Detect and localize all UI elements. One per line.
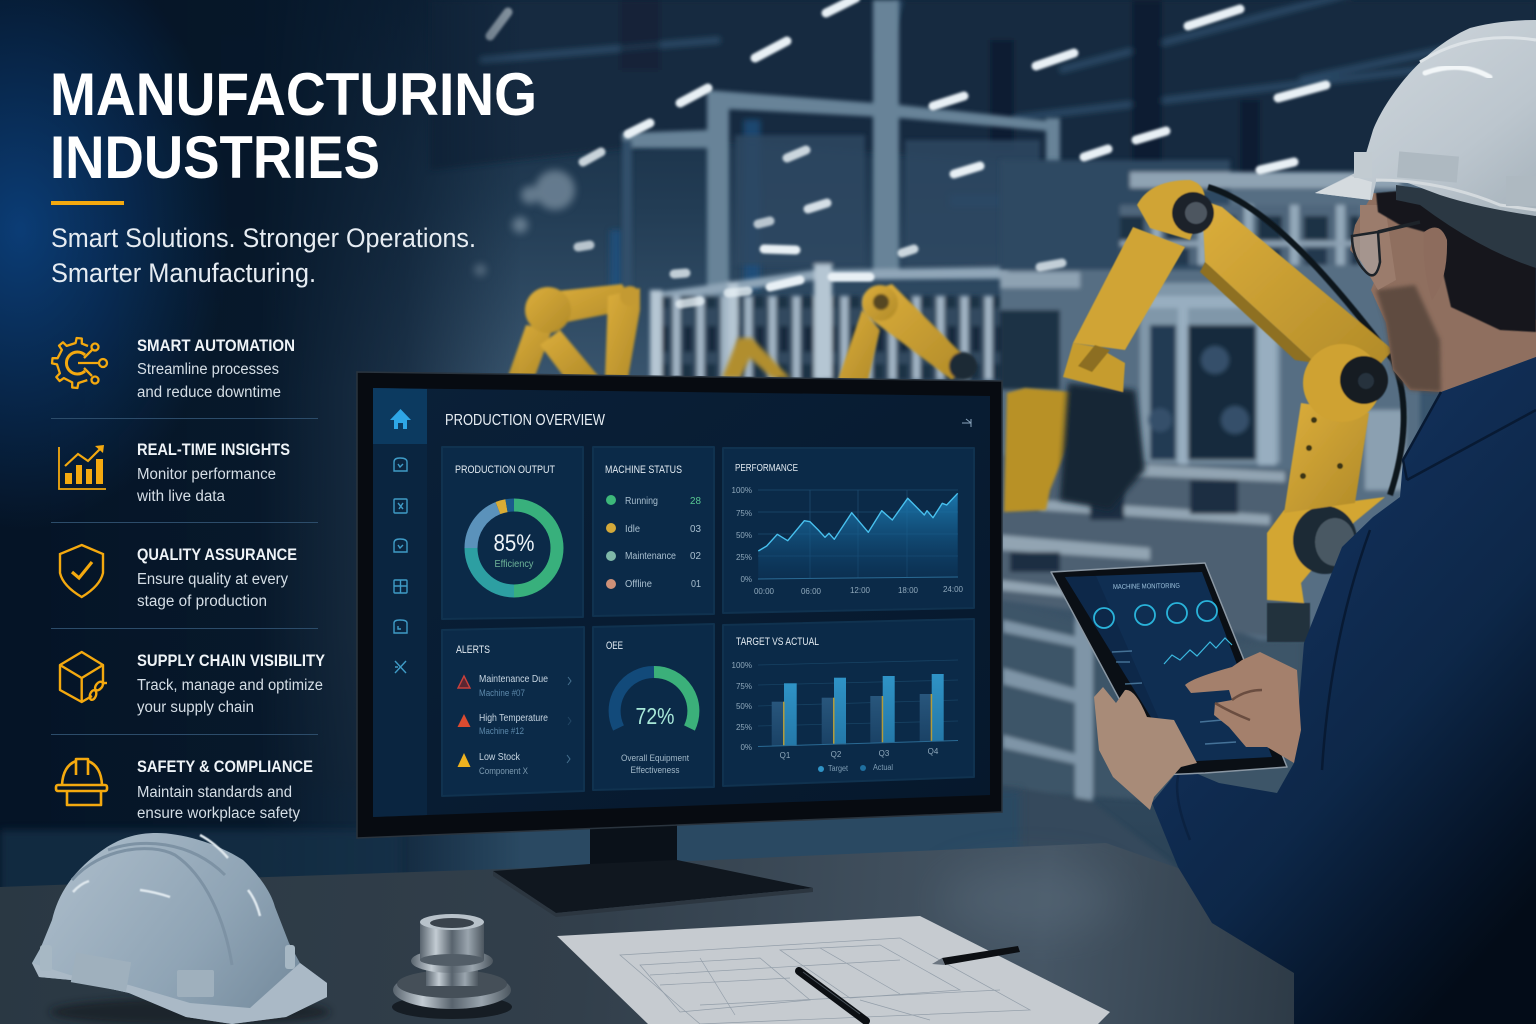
feature list	[51, 336, 326, 822]
panel: OEE: 72%	[636, 703, 674, 729]
icon: gear	[52, 338, 107, 388]
icon: shield	[60, 545, 103, 597]
subtitle	[51, 223, 476, 288]
panel: target vs actual: 75%	[736, 682, 752, 691]
feature: safety and compliance	[56, 757, 313, 822]
panel: performance: 0%	[740, 575, 752, 584]
title: MANUFACTURING	[50, 61, 537, 128]
monitor bezel	[357, 372, 1002, 838]
blueprint paper	[557, 916, 1110, 1024]
feature: smart automation	[52, 336, 295, 401]
sidebar icons	[394, 458, 407, 673]
feature: real-time insights	[59, 440, 290, 505]
second pen	[932, 946, 1020, 965]
hard hat	[1315, 20, 1536, 216]
title	[50, 61, 537, 191]
panel: OEE: Effectiveness	[630, 765, 680, 776]
panel: performance: 75%	[736, 509, 752, 518]
panel: performance: 25%	[736, 553, 752, 562]
panel: performance	[723, 448, 974, 613]
panel: machine status: Idle	[625, 524, 640, 535]
feature: safety and compliance: ensure workplace safety	[137, 805, 300, 822]
feature: smart automation: Streamline processes	[137, 361, 279, 378]
panel: performance: 50%	[736, 531, 752, 540]
feature: smart automation: and reduce downtime	[137, 384, 281, 401]
panel: production output	[442, 447, 583, 619]
icon: alert yellow	[458, 753, 470, 767]
robot arm: small distant	[722, 338, 790, 378]
panel: target vs actual: Q2	[831, 750, 842, 759]
panel: target vs actual: 50%	[736, 702, 752, 711]
subtitle: Smart Solutions. Stronger Operations.	[51, 223, 476, 253]
feature: supply chain visibility	[60, 651, 326, 716]
panel: target vs actual: Q3	[879, 749, 890, 758]
panel: OEE: Overall Equipment	[621, 753, 689, 764]
lower frame	[1000, 600, 1300, 810]
feature: safety and compliance: SAFETY & COMPLIANCE	[137, 757, 313, 776]
feature: real-time insights: REAL-TIME INSIGHTS	[137, 440, 290, 459]
feature: real-time insights: Monitor performance	[137, 466, 276, 483]
legend	[818, 763, 893, 773]
feature: quality assurance: stage of production	[137, 593, 267, 610]
panel: OEE	[593, 624, 714, 790]
sidebar	[373, 388, 427, 817]
tablet	[1051, 563, 1287, 775]
panel: performance: 24:00	[943, 585, 964, 594]
panel: alerts: ALERTS	[456, 644, 490, 656]
floor	[300, 790, 1020, 880]
shoulder	[1137, 180, 1205, 240]
panel: machine status: Offline	[625, 579, 652, 590]
conveyor rows	[1000, 455, 1290, 640]
pen on paper	[799, 971, 866, 1021]
helmet band	[1396, 185, 1536, 268]
feature: supply chain visibility: Track, manage and optimize	[137, 677, 323, 694]
feature: quality assurance: QUALITY ASSURANCE	[137, 545, 297, 564]
gauge chart	[615, 672, 693, 728]
panel: performance: 100%	[732, 486, 752, 495]
panel: alerts: Maintenance Due	[479, 674, 548, 685]
right hand	[1185, 652, 1301, 763]
left background bokeh	[474, 170, 575, 276]
panel: alerts: Machine #07	[479, 688, 525, 698]
monitor stand	[493, 824, 813, 917]
tablet: MACHINE MONITORING	[1113, 583, 1180, 591]
icon: helmet	[56, 759, 107, 805]
subtitle: Smarter Manufacturing.	[51, 258, 316, 288]
right machinery	[1000, 160, 1420, 870]
glasses	[1352, 222, 1420, 275]
export icon	[962, 419, 971, 427]
panel: target vs actual: 25%	[736, 723, 752, 732]
feature: quality assurance	[60, 545, 297, 610]
bar chart	[758, 660, 958, 746]
jacket details	[1177, 392, 1536, 840]
robot arm: middle	[838, 284, 977, 380]
panel: performance: PERFORMANCE	[735, 463, 798, 474]
icon: chart	[59, 445, 106, 489]
panel: machine status: Maintenance	[625, 551, 676, 562]
ceiling structure	[430, 0, 1536, 310]
robot arm: far left	[508, 284, 640, 378]
robot arm: main yellow	[1004, 180, 1404, 642]
feature: safety and compliance: Maintain standards and	[137, 784, 292, 801]
panel: production output: PRODUCTION OUTPUT	[455, 464, 555, 476]
title accent	[51, 201, 124, 205]
panel: machine status: Running	[625, 496, 658, 507]
panel: alerts: High Temperature	[479, 713, 548, 724]
panel: machine status: 02	[690, 551, 701, 562]
icon: box	[60, 652, 107, 702]
worker	[1051, 20, 1536, 1024]
secondary yellow machine	[1004, 388, 1072, 512]
panel: target vs actual: Q4	[928, 747, 939, 756]
icon: home	[390, 409, 411, 429]
left dark panel overlay	[0, 0, 520, 1024]
jacket	[1152, 357, 1536, 1024]
panel: production output: Efficiency	[494, 559, 534, 570]
feature: quality assurance: Ensure quality at every	[137, 571, 288, 588]
panel: target vs actual: TARGET VS ACTUAL	[736, 636, 819, 648]
legend: Actual	[873, 763, 893, 772]
panel: machine status: MACHINE STATUS	[605, 464, 682, 476]
feature: smart automation: SMART AUTOMATION	[137, 336, 295, 355]
panel: production output: 85%	[494, 530, 534, 557]
legend: Target	[828, 764, 849, 773]
upper arm	[1202, 200, 1393, 375]
icon: alert red	[458, 714, 470, 727]
desk	[0, 843, 1294, 1024]
panel: machine status: 28	[690, 496, 701, 507]
panel: OEE: OEE	[606, 640, 623, 652]
panel: target vs actual: Q1	[780, 751, 791, 760]
steel frames	[622, 0, 1140, 380]
panel: performance: 00:00	[754, 587, 775, 596]
ear	[1424, 228, 1447, 300]
monitor	[357, 372, 1002, 917]
panel: performance: 06:00	[801, 587, 822, 596]
safety helmet on desk	[32, 833, 330, 1024]
panel: alerts	[442, 627, 584, 796]
panel: performance: 18:00	[898, 586, 919, 595]
monitor screen	[373, 388, 990, 817]
feature: real-time insights: with live data	[136, 488, 225, 505]
title: INDUSTRIES	[50, 124, 380, 191]
lower arm	[1284, 403, 1369, 513]
forearm	[1073, 227, 1185, 350]
panel: machine status	[593, 447, 714, 616]
panel: machine status: 03	[690, 524, 701, 535]
panel: target vs actual: 0%	[740, 743, 752, 752]
panel: alerts: Component X	[479, 766, 528, 776]
dashboard title: PRODUCTION OVERVIEW	[445, 412, 606, 429]
panel: alerts: Low Stock	[479, 752, 521, 763]
left hand	[1094, 687, 1197, 810]
feature: supply chain visibility: SUPPLY CHAIN VISIBILITY	[137, 651, 326, 670]
icon: alert outline	[458, 676, 470, 688]
panel: target vs actual	[723, 619, 974, 786]
base	[1267, 603, 1310, 642]
donut chart	[471, 505, 557, 591]
ceiling lights	[490, 0, 1326, 304]
worker neck and face	[1350, 193, 1536, 392]
metal part	[392, 914, 512, 1019]
panel: target vs actual: 100%	[732, 661, 752, 670]
panel: machine status: 01	[691, 579, 701, 590]
worker hair	[1376, 190, 1536, 332]
tablet screen	[1065, 572, 1272, 762]
panel: performance: 12:00	[850, 586, 871, 595]
panel: alerts: Machine #12	[479, 726, 524, 736]
right hand shading	[1215, 690, 1262, 720]
elbow	[1303, 344, 1381, 422]
feature: supply chain visibility: your supply chain	[137, 699, 254, 716]
area chart	[758, 490, 958, 579]
